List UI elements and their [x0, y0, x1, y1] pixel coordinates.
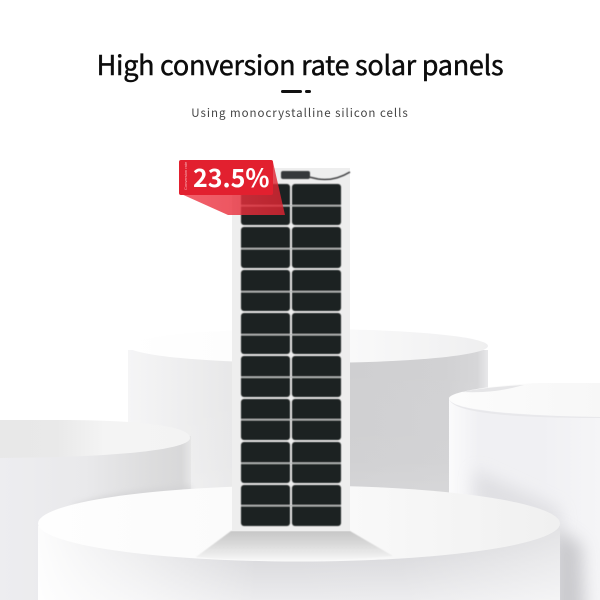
back podium: [128, 329, 488, 505]
badge: 23.5% conversion rate: [179, 159, 285, 215]
right podium: [449, 383, 600, 600]
junction box and cable: [281, 171, 350, 180]
title divider: [281, 90, 311, 93]
title: High conversion rate solar panels: [97, 44, 503, 83]
left podium: [0, 420, 191, 600]
badge fold: [179, 162, 285, 215]
panel contact shadow: [196, 531, 393, 560]
solar panel: [232, 168, 350, 531]
cell busbars: [241, 205, 341, 506]
subtitle: Using monocrystalline silicon cells: [191, 105, 409, 121]
left cell column: [241, 184, 290, 526]
right cell column: [292, 184, 341, 526]
badge small vertical label: Conversion rate: [183, 161, 188, 190]
badge value: 23.5%: [193, 159, 269, 195]
front podium side shadow: [552, 525, 585, 600]
badge plate: [179, 160, 273, 195]
front podium: [38, 486, 560, 600]
